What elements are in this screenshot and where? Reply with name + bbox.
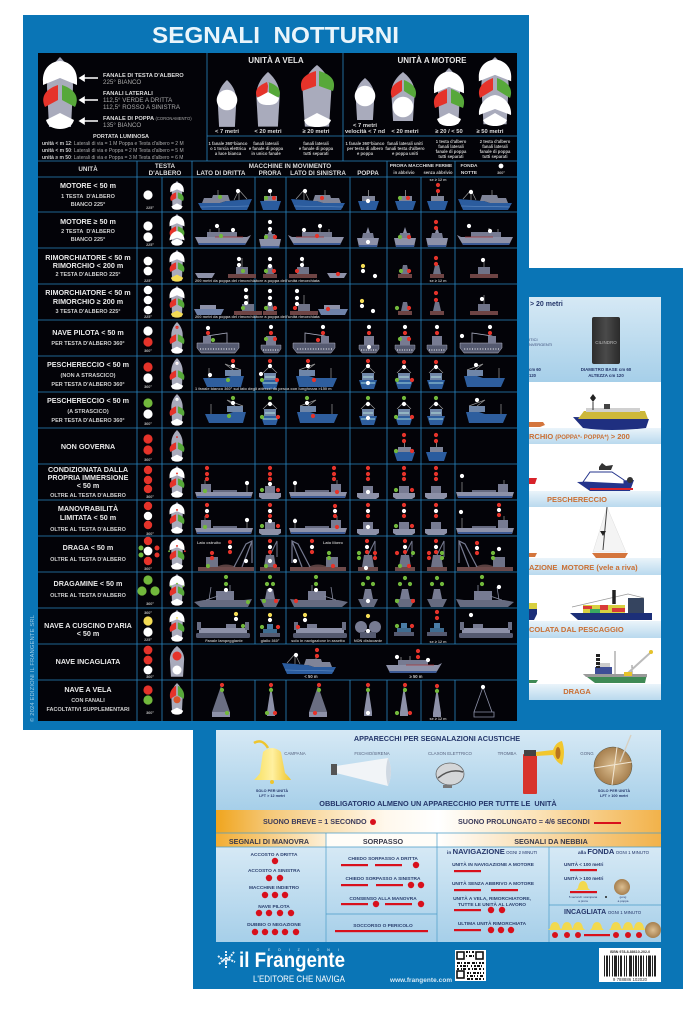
row: nave a vela: 360° — [146, 711, 154, 715]
boat: motor 20 to 50 — [434, 68, 464, 126]
row: rimorchiatore short tow: 200 metri da poppa del rimorchiatore a poppa dell'unità rimorchiata — [195, 278, 320, 283]
table header: D'ALBERO — [149, 170, 181, 177]
title: SEGNALI NOTTURNI — [152, 22, 399, 48]
partial dimensions 2: 120 — [529, 373, 537, 378]
light descriptions: fanali laterali — [303, 141, 329, 146]
table header: MACCHINE IN MOVIMENTO — [249, 163, 331, 170]
light descriptions: 1 fanale 360°bianco — [209, 141, 248, 146]
length labels: ≥ 20 / < 50 — [435, 129, 463, 135]
row: motore under 50: BIANCO 225° — [71, 202, 105, 208]
panel: day signals behind — [529, 297, 661, 700]
header cells: SEGNALI DA NEBBIA — [514, 837, 588, 846]
label band: motore: AZIONE MOTORE (vele a riva) — [529, 563, 638, 572]
table header: 360° — [497, 171, 505, 175]
column: sorpasso: CHIEDO SORPASSO A SINISTRA — [346, 876, 421, 882]
row: condizionata immersione — [48, 465, 514, 499]
qr code — [455, 950, 486, 981]
row: motore under 50: 1 TESTA D'ALBERO — [61, 194, 116, 200]
arrows — [80, 76, 98, 124]
row: rimorchiatore short tow: RIMORCHIATORE < 50 m — [45, 253, 131, 262]
row: motore under 50: MOTORE < 50 m — [60, 181, 116, 190]
barcode — [599, 948, 661, 982]
row: peschereccio a strascico: PER TESTA D'ALBERO 360° — [51, 418, 125, 424]
column: nebbia in navigazione: UNITÀ SENZA ABBRIVO A MOTORE — [452, 880, 535, 887]
icon: cylinder — [592, 317, 620, 364]
column: incagliata: INCAGLIATA OGNI 1 MINUTO — [564, 909, 642, 916]
label band: pescaggio — [529, 621, 661, 638]
label band: pescaggio: COLATA DAL PESCAGGIO — [529, 625, 624, 634]
legend text: 112,5° ROSSO A SINISTRA — [103, 104, 181, 111]
portata luminosa: unità < m 50: Laterali di via e Poppa = 2 M Testa d'albero = 5 M — [42, 148, 184, 154]
table header: PRORA MACCHINE FERME — [390, 163, 453, 169]
row: nave pilota: PER TESTA D'ALBERO 360° — [51, 341, 125, 347]
portata luminosa: unità < m 12: Laterali di via = 1 M Poppa e Testa d'albero = 2 M — [42, 141, 184, 147]
length labels: ≥ 50 metri — [476, 129, 504, 135]
row: non governa: NON GOVERNA — [61, 442, 115, 451]
boat: motor under 7 — [355, 78, 375, 120]
row: peschereccio non a strascico: PER TESTA D'ALBERO 360° — [51, 382, 125, 388]
sound length bar: SUONO BREVE = 1 SECONDO — [263, 817, 367, 826]
length labels: < 20 metri — [254, 129, 282, 135]
row: rimorchiatore short tow: 225° — [144, 279, 152, 283]
label band: peschereccio: PESCHERECCIO — [547, 495, 607, 504]
black table background — [38, 53, 517, 721]
row: draga: Lato libero — [323, 540, 344, 545]
row: draga: OLTRE AL TESTA D'ALBERO — [50, 557, 127, 563]
heading: unita a vela: UNITÀ A VELA — [248, 56, 304, 65]
portata luminosa — [42, 134, 184, 161]
length labels: < 7 metri — [215, 129, 239, 135]
light descriptions: e fanale di poppa — [299, 146, 334, 151]
logo: il frangente — [218, 948, 347, 984]
row: non governa: 360° — [144, 458, 152, 462]
sound length bar — [216, 810, 661, 833]
icon: horn — [523, 741, 564, 794]
light descriptions: 1 fanale 360°bianco — [346, 141, 385, 146]
table header: senza abbrivio — [423, 170, 453, 175]
cylinder dimensions: DIAMETRO BASE cm 60 — [581, 367, 632, 372]
column: manovra: MACCHINE INDIETRO — [249, 885, 299, 891]
label band: rimorchio: RCHIO (POPPA*- POPPA*) > 200 — [529, 432, 630, 441]
row: peschereccio non a strascico: PESCHERECCIO < 50 m — [47, 360, 129, 369]
portata luminosa: unità ≥ m 50: Laterali di via e Poppa = 3 M Testa d'albero = 6 M — [42, 155, 183, 161]
length labels: ≥ 20 metri — [302, 129, 330, 135]
row: rimorchiatore long tow: RIMORCHIO ≥ 200 m — [53, 297, 123, 306]
row: condizionata immersione: < 50 m — [77, 481, 99, 490]
row: nave a cuscino d'aria: 225° — [144, 638, 152, 642]
logo text: il Frangente — [239, 948, 345, 972]
row: dragamine: DRAGAMINE < 50 m — [54, 579, 122, 588]
label band: motore — [529, 558, 661, 575]
light descriptions: e poppa — [357, 151, 374, 156]
row: draga: 360° — [144, 567, 152, 571]
acoustic devices background — [216, 730, 661, 810]
column: sorpasso: CHIEDO SORPASSO A DRITTA — [348, 856, 418, 862]
column: nebbia in navigazione: in NAVIGAZIONE OGNI 2 MINUTI — [447, 847, 537, 856]
row: rimorchiatore short tow: RIMORCHIO < 200 m — [53, 261, 123, 270]
table header: POPPA — [357, 170, 379, 177]
icon: bell — [254, 741, 291, 784]
row: peschereccio a strascico — [47, 394, 507, 426]
column: nebbia in navigazione: UNITÀ A VELA, RIMORCHIATORE, — [453, 895, 532, 902]
row: condizionata immersione: OLTRE AL TESTA D'ALBERO — [50, 493, 127, 499]
header cells — [216, 833, 661, 847]
row: rimorchiatore short tow: se ≥ 12 m — [429, 279, 447, 283]
device notes: SOLO PER UNITÀ — [598, 788, 630, 793]
row: condizionata immersione: CONDIZIONATA DALLA — [48, 465, 128, 474]
white strips — [529, 382, 661, 700]
row: manovrabilita limitata: OLTRE AL TESTA D'ALBERO — [50, 527, 127, 533]
row: motore over 50: 225° — [146, 243, 154, 247]
background back panel — [193, 268, 683, 989]
column: nebbia alla fonda: 5 secondi: scampana — [569, 895, 598, 899]
row: nave incagliata: 360° — [146, 675, 154, 679]
barcode: ISBN 978-8-88610-202-0 — [610, 950, 650, 954]
light descriptions: tutti separati — [438, 154, 464, 159]
light descriptions: e fanale di poppa — [249, 146, 284, 151]
table header: NOTTE — [461, 170, 478, 176]
row: rimorchiatore long tow: 225° — [144, 315, 152, 319]
boat: motor under 20 — [391, 72, 416, 121]
device labels: CLAXON ELETTRICO — [428, 751, 473, 756]
column: sorpasso: CONSENSO ALLA MANOVRA — [349, 896, 417, 902]
row: nave pilota: 360° — [144, 349, 152, 353]
light descriptions: 1 testa d'albero — [436, 139, 467, 144]
table grid — [38, 53, 517, 721]
row: motore over 50 — [60, 214, 513, 248]
column: nebbia alla fonda: a poppa — [618, 899, 629, 903]
row: nave incagliata — [56, 646, 442, 679]
column: nebbia alla fonda: alla FONDA OGNI 1 MINUTO — [578, 847, 650, 856]
header cells: SEGNALI DI MANOVRA — [229, 837, 309, 846]
ship: dredger — [583, 650, 653, 683]
table header: PRORA — [259, 170, 282, 177]
light descriptions: a luce bianca — [215, 151, 242, 156]
row: nave a cuscino d'aria: 360° — [144, 611, 152, 615]
legend text: 225° BIANCO — [103, 79, 141, 86]
column: nebbia in navigazione: UNITÀ IN NAVIGAZIONE A MOTORE — [452, 861, 535, 868]
boat: sail under 7 — [217, 80, 237, 127]
boat: sail under 20 — [256, 72, 280, 127]
device labels: TROMBA — [498, 751, 516, 756]
row: nave a cuscino d'aria: < 50 m — [77, 629, 99, 638]
light descriptions: in unico fanale — [251, 151, 281, 156]
legend: light sectors — [42, 57, 192, 161]
length labels: < 20 metri — [391, 129, 419, 135]
length labels: velocità < 7 nd — [345, 129, 386, 135]
device labels: FISCHIO/SIRENA — [354, 751, 390, 756]
row: nave a vela: se ≥ 12 m — [429, 717, 447, 721]
row: rimorchiatore short tow: 2 TESTA D'ALBERO 225° — [56, 272, 120, 278]
obligation note: OBBLIGATORIO ALMENO UN APPARECCHIO PER TUTTE LE UNITÀ — [319, 799, 557, 808]
light descriptions: fanali laterali — [253, 141, 279, 146]
row: peschereccio non a strascico: 1 fanale bianco 360° sul lato degli attrezzi da pesca con lunghezza >150 m — [195, 386, 332, 391]
legend text: FANALE DI TESTA D'ALBERO — [103, 73, 184, 79]
row: nave a cuscino d'aria: Fanale lampeggiante — [205, 639, 243, 643]
row: manovrabilita limitata: MANOVRABILITÀ — [58, 504, 118, 513]
signals table background — [216, 847, 661, 942]
column: nebbia alla fonda: UNITÀ > 100 metri — [564, 875, 603, 881]
row: draga: Lato ostruito — [197, 540, 221, 545]
column: nebbia alla fonda: a prora — [578, 899, 588, 903]
light descriptions: fanali testa d'albero — [385, 146, 425, 151]
device labels: CAMPANA — [284, 751, 306, 756]
row: nave a vela: NAVE A VELA — [64, 685, 112, 694]
table header: LATO DI SINISTRA — [290, 170, 346, 177]
row: peschereccio a strascico: 360° — [144, 422, 152, 426]
light descriptions: per testa di albero — [347, 146, 383, 151]
ship: sailing boat under motor — [592, 507, 628, 558]
column: manovra: ACCOSTO A SINISTRA — [248, 868, 301, 874]
row: draga — [50, 537, 513, 571]
light descriptions: fanale di poppa — [436, 149, 467, 154]
cylinder dimensions — [581, 367, 632, 378]
row: motore under 50: 225° — [146, 206, 154, 210]
row: rimorchiatore long tow: RIMORCHIATORE < 50 m — [45, 288, 131, 297]
icon: siren — [331, 758, 391, 786]
row: peschereccio a strascico: PESCHERECCIO < 50 m — [47, 396, 129, 405]
boats by length — [217, 57, 511, 127]
row: manovrabilita limitata: LIMITATA < 50 m — [60, 513, 116, 522]
row: nave a cuscino d'aria: NON dislocante — [354, 639, 382, 643]
row: manovrabilita limitata: 360° — [146, 532, 154, 536]
row: nave a cuscino d'aria — [44, 610, 513, 644]
column: sorpasso: SOCCORSO O PERICOLO — [353, 923, 413, 929]
row: motore under 50: se ≥ 12 m — [429, 178, 447, 182]
row: rimorchiatore long tow — [45, 286, 498, 319]
table header: LATO DI DRITTA — [197, 170, 246, 177]
panel: segnalazioni acustiche — [216, 730, 661, 942]
ship: ferry — [573, 394, 649, 430]
header cells: SORPASSO — [363, 837, 404, 846]
table header: in abbrivio — [393, 170, 415, 175]
row: peschereccio non a strascico: 360° — [144, 385, 152, 389]
label band: rimorchio — [529, 428, 661, 444]
column: nebbia alla fonda — [564, 847, 650, 903]
row: dragamine: OLTRE AL TESTA D'ALBERO — [50, 593, 127, 599]
row: peschereccio non a strascico: (NON A STRASCICO) — [61, 373, 116, 379]
cylinder dimensions: ALTEZZA cm 120 — [588, 373, 624, 378]
device notes: LFT > 100 metri — [600, 794, 628, 798]
portata luminosa: PORTATA LUMINOSA — [93, 134, 149, 140]
boat: sail over 20 — [301, 65, 334, 127]
legend text: 135° BIANCO — [103, 122, 141, 129]
row: peschereccio non a strascico — [47, 358, 505, 391]
column: manovra — [247, 852, 302, 935]
row: nave a cuscino d'aria: NAVE A CUSCINO D'ARIA — [44, 621, 132, 630]
row: manovrabilita limitata — [50, 502, 514, 536]
legend text — [103, 73, 192, 129]
legend text: 112,5° VERDE A DRITTA — [103, 97, 173, 104]
copyright: © 2024 EDIZIONI IL FRANGENTE SRL — [29, 614, 36, 722]
length labels: < 7 metri — [353, 123, 377, 129]
website: www.frangente.com — [389, 977, 452, 984]
row: motore over 50: 2 TESTA D'ALBERO — [61, 229, 116, 235]
column: nebbia in navigazione — [447, 847, 537, 933]
partial dimensions: cm 60 — [529, 367, 542, 372]
row: rimorchiatore short tow — [45, 250, 498, 283]
row: nave pilota: NAVE PILOTA < 50 m — [52, 328, 124, 337]
row: nave incagliata: NAVE INCAGLIATA — [56, 657, 120, 666]
table dividers — [216, 833, 661, 942]
table header: TESTA — [155, 163, 176, 170]
row: motore under 50 — [60, 178, 512, 210]
length labels — [215, 123, 504, 135]
light descriptions: tutti separati — [303, 151, 329, 156]
icon: claxon — [436, 763, 464, 788]
label band: peschereccio — [529, 491, 661, 507]
icon: coral — [218, 950, 235, 968]
table header — [78, 163, 505, 177]
row: rimorchiatore long tow: 3 TESTA D'ALBERO 225° — [56, 309, 120, 315]
light descriptions: o 1 torcia elettrica — [210, 146, 247, 151]
row: nave a cuscino d'aria: giallo 360° — [261, 639, 280, 643]
row: nave incagliata: < 50 m — [304, 674, 318, 679]
table header: UNITÀ — [78, 164, 98, 173]
row: peschereccio a strascico: (A STRASCICO) — [67, 409, 109, 415]
row: motore over 50: MOTORE ≥ 50 m — [60, 217, 116, 226]
heading: apparecchi: APPARECCHI PER SEGNALAZIONI ACUSTICHE — [354, 734, 520, 743]
partial text left 2: NVERGENTI — [529, 342, 552, 347]
row: non governa — [61, 430, 447, 462]
label band: draga: DRAGA — [563, 687, 591, 696]
row: dragamine — [50, 574, 514, 607]
light descriptions: e poppa uniti — [392, 151, 418, 156]
legend text: FANALI LATERALI — [103, 91, 153, 97]
row: nave a cuscino d'aria: solo in navigazione in assetto — [291, 639, 346, 643]
icon: cylinder: CILINDRO — [595, 340, 617, 345]
heading: over 20 metres: > 20 metri — [530, 301, 563, 308]
device labels: GONG — [580, 751, 594, 756]
light descriptions: fanali laterali — [482, 144, 508, 149]
column: manovra: NAVE PILOTA — [258, 904, 290, 910]
device notes — [256, 788, 630, 798]
icon: gong — [594, 735, 632, 785]
boat: motor over 50 — [479, 57, 511, 126]
row: rimorchiatore long tow: 200 metri da poppa del rimorchiatore a poppa dell'unità rimorchiata — [195, 314, 320, 319]
barcode: 9 788886 102020 — [613, 977, 648, 982]
tagline: L'EDITORE CHE NAVIGA — [253, 974, 345, 984]
ship: motor boat — [577, 463, 634, 491]
light descriptions: tutti separati — [482, 154, 508, 159]
panel: segnali notturni — [23, 15, 529, 730]
sound length bar: SUONO PROLUNGATO = 4/6 SECONDI — [458, 817, 590, 826]
row: nave a vela: CON FANALI — [71, 698, 105, 704]
row: nave a vela: FACOLTATIVI SUPPLEMENTARI — [46, 707, 130, 713]
column: nebbia alla fonda: gong — [620, 895, 627, 899]
label band: draga — [529, 684, 661, 700]
ship: container vessel — [570, 590, 652, 620]
column: manovra: DUBBIO O NEGAZIONE — [247, 922, 302, 928]
row: nave pilota — [51, 322, 502, 354]
column: incagliata — [548, 909, 661, 938]
light descriptions — [209, 139, 511, 159]
icon: boat with sectors — [43, 57, 77, 129]
device notes: SOLO PER UNITÀ — [256, 788, 288, 793]
row: draga: DRAGA < 50 m — [63, 543, 113, 552]
main blue panel — [23, 15, 529, 730]
row: condizionata immersione: 360° — [146, 495, 154, 499]
column: nebbia in navigazione: ULTIMA UNITÀ RIMORCHIATA — [458, 920, 527, 927]
legend text: FANALE DI POPPA (CORONAMENTO) — [103, 116, 192, 122]
heading: unita a motore: UNITÀ A MOTORE — [397, 56, 467, 65]
partial ships at left edge — [529, 422, 545, 683]
light descriptions: fanale di poppa — [480, 149, 511, 154]
light descriptions: fanali laterali uniti — [387, 141, 423, 146]
row: nave incagliata: ≥ 50 m — [409, 674, 423, 679]
column: sorpasso — [335, 856, 428, 932]
column: nebbia in navigazione: TUTTE LE UNITÀ AL LAVORO — [458, 901, 526, 908]
day shapes header panel — [529, 297, 661, 382]
light descriptions: 2 testa d'albero — [480, 139, 511, 144]
row: condizionata immersione: PROPRIA IMMERSIONE — [48, 473, 129, 482]
row: nave a cuscino d'aria: se ≥ 12 m — [429, 640, 447, 644]
column: manovra: ACCOSTO A DRITTA — [251, 852, 298, 858]
partial text left: ITICI — [529, 337, 538, 342]
device labels — [284, 751, 594, 756]
row: dragamine: 360° — [146, 602, 154, 606]
device notes: LFT > 12 metri — [259, 794, 285, 798]
row: nave a vela — [46, 683, 494, 721]
column: nebbia alla fonda: UNITÀ < 100 metri — [564, 861, 603, 867]
edizioni: EDIZIONI — [268, 948, 347, 952]
table header: FONDA — [460, 163, 478, 169]
light descriptions: fanali laterali — [438, 144, 464, 149]
row: motore over 50: BIANCO 225° — [71, 237, 105, 243]
